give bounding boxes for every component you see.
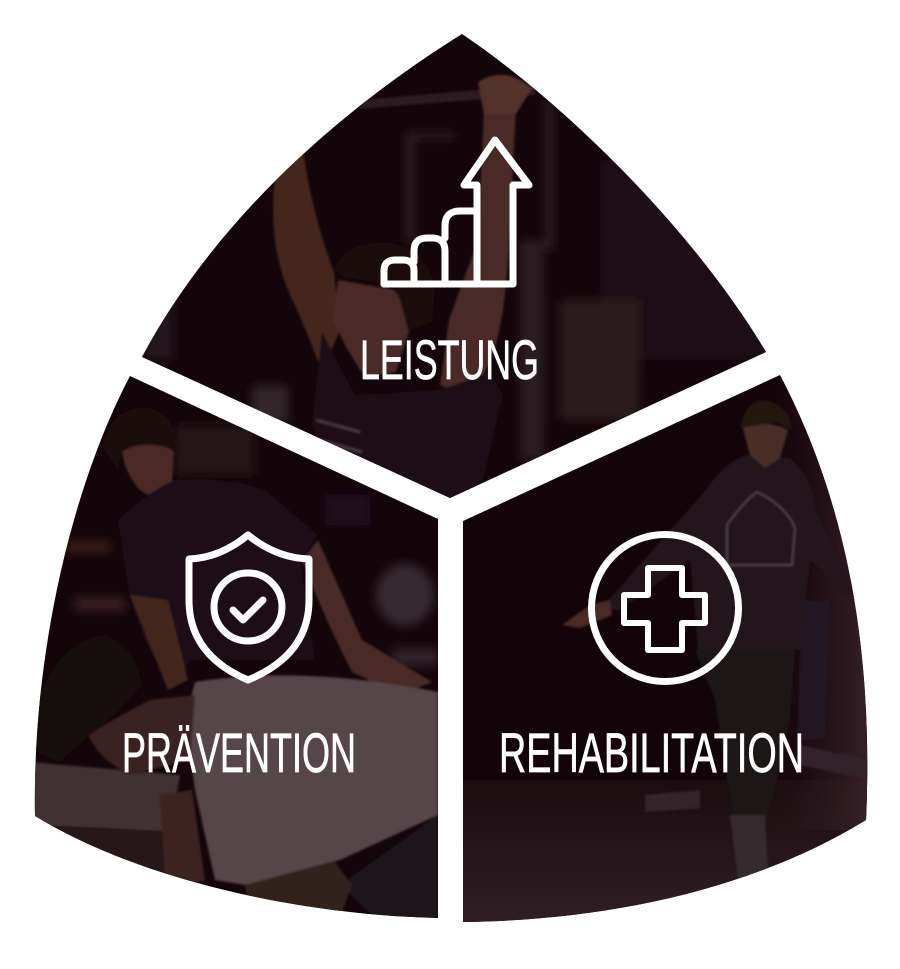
label: Leistung: LEISTUNG (360, 328, 539, 391)
panel: Leistung (130, 30, 780, 510)
floor and mat (30, 762, 180, 832)
arms (273, 150, 340, 372)
hand (562, 600, 612, 628)
client shirt (185, 675, 438, 885)
barbell (360, 85, 535, 109)
legs (695, 650, 795, 825)
face and hair (333, 280, 412, 378)
trainer (122, 441, 174, 495)
panel: Rehabilitation (460, 370, 875, 930)
client head (88, 695, 195, 775)
shorts and legs (340, 815, 438, 918)
icon: medical cross in circle (592, 534, 738, 682)
client arm (160, 790, 205, 885)
photo: athlete lifting barbell (130, 30, 780, 510)
icon: rising bars with arrow (384, 140, 529, 284)
label: Prävention: PRÄVENTION (122, 721, 356, 784)
photo: athlete balancing on one leg (460, 370, 875, 930)
bench (797, 600, 830, 740)
photo: trainer correcting client (30, 370, 440, 930)
hoodie (600, 455, 860, 650)
panel: Prävention (30, 370, 440, 930)
head (743, 423, 788, 468)
shirt (312, 332, 503, 500)
icon: shield with check (189, 535, 309, 680)
